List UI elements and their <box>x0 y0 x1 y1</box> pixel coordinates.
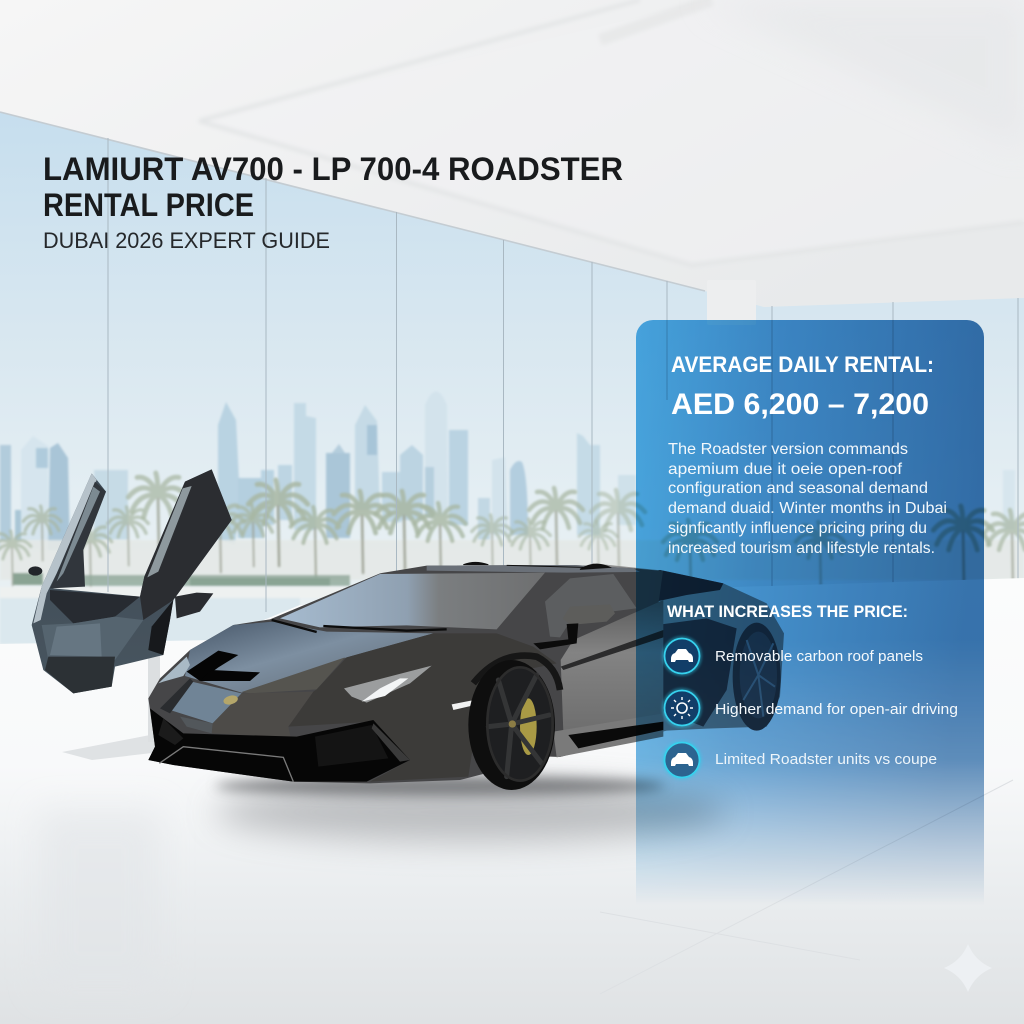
panel background <box>636 320 984 960</box>
ceiling <box>0 0 1024 320</box>
hood reflection <box>185 622 433 693</box>
description <box>668 441 947 557</box>
splitter <box>159 747 293 782</box>
white showroom floor <box>0 578 1024 1024</box>
title: LAMIURT AV700 - LP 700-4 ROADSTER <box>43 151 623 187</box>
black lower intake <box>148 708 410 782</box>
structural column <box>707 280 756 325</box>
roof rail <box>427 565 640 573</box>
windshield <box>280 573 545 629</box>
description: signficantly influence pricing pring du <box>668 520 927 537</box>
palm trees and shore <box>0 473 1024 644</box>
price range: AED 6,200 – 7,200 <box>671 388 929 421</box>
headlight <box>344 666 432 703</box>
icon: sparkle <box>944 944 992 992</box>
display pedestal <box>62 650 178 760</box>
badge <box>222 694 239 706</box>
factor: open-air demand: Higher demand for open-air driving <box>715 701 958 718</box>
car body silhouette <box>148 565 663 783</box>
title: RENTAL PRICE <box>43 187 254 223</box>
hood vents <box>187 651 238 681</box>
wipers <box>272 620 447 632</box>
hood gray panel <box>242 657 345 693</box>
price heading: AVERAGE DAILY RENTAL: <box>671 352 934 377</box>
door crease <box>561 630 663 670</box>
title <box>43 151 623 223</box>
factor: limited units <box>664 742 937 778</box>
description: configuration and seasonal demand <box>668 480 928 497</box>
fender <box>288 633 557 782</box>
factor: limited units: Limited Roadster units vs coupe <box>715 751 937 768</box>
grille mesh <box>315 725 388 767</box>
left headlight <box>158 657 190 683</box>
car rear section <box>560 563 784 757</box>
description: The Roadster version commands <box>668 441 908 458</box>
side window <box>545 574 637 637</box>
window mullions <box>108 138 1018 640</box>
roof clips <box>463 562 610 569</box>
city skyline <box>0 392 1015 550</box>
description: apemium due it oeie open-roof <box>668 461 903 478</box>
mirror <box>563 604 615 625</box>
glass wall with sky <box>0 112 1024 660</box>
front wheel <box>468 660 555 790</box>
subtitle: DUBAI 2026 EXPERT GUIDE <box>43 228 330 253</box>
description: demand duaid. Winter months in Dubai <box>668 500 947 517</box>
description: increased tourism and lifestyle rentals. <box>668 540 935 557</box>
factors heading: WHAT INCREASES THE PRICE: <box>667 602 908 621</box>
factor: roof panels <box>664 638 923 674</box>
door <box>561 600 663 732</box>
car floor shadow <box>215 776 725 842</box>
factor: open-air demand <box>664 690 958 726</box>
daytime light <box>452 699 477 710</box>
main car: black roadster <box>148 562 663 790</box>
detached open-door car part <box>28 469 232 693</box>
factor: roof panels: Removable carbon roof panels <box>715 648 923 665</box>
sill <box>553 713 663 757</box>
nose reflection <box>170 682 242 723</box>
panel: pricing <box>636 320 984 960</box>
